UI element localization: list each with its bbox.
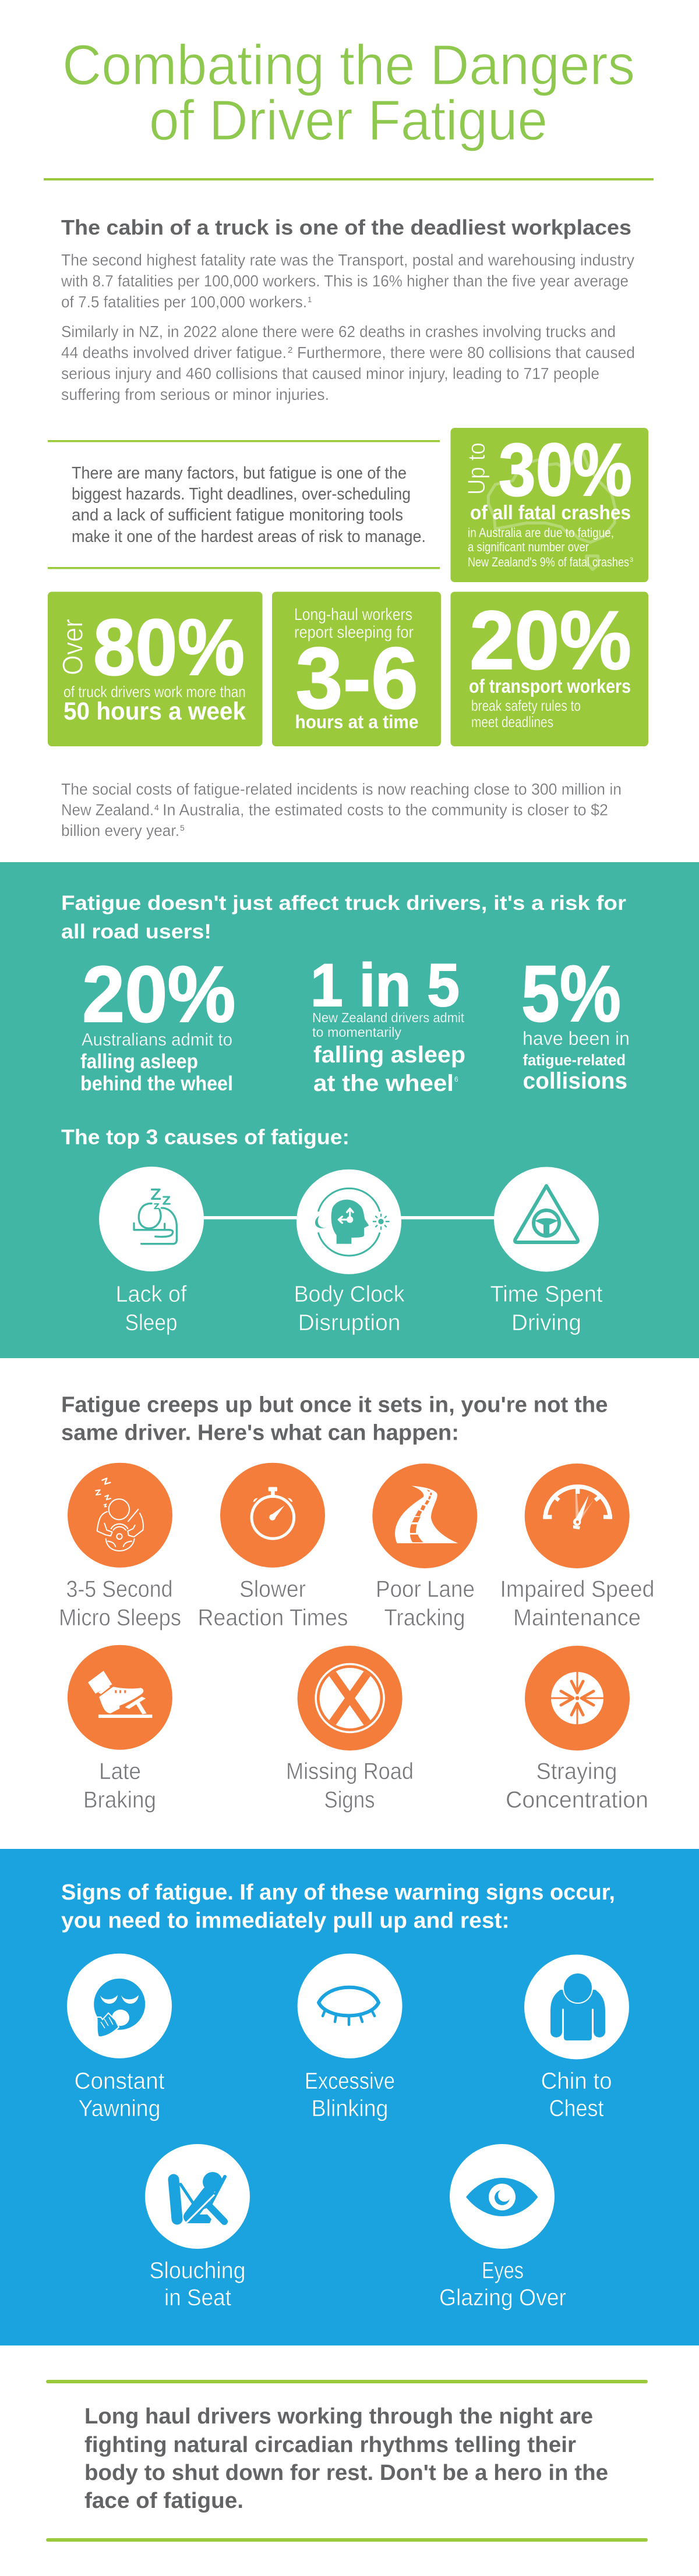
labels: signs: Glazing Over [439, 2285, 566, 2311]
text block: NZ deaths: Similarly in NZ, in 2022 alone there were 62 deaths in crashes involving trucks and [61, 323, 616, 341]
labels: signs: Yawning [78, 2096, 161, 2121]
text block: NZ deaths: serious injury and 460 collisions that caused minor injury, leading to 717 people [61, 364, 599, 382]
stat: 80%: 80% [93, 603, 245, 692]
title: Combating the Dangers [62, 33, 635, 97]
labels: signs: in Seat [164, 2285, 231, 2311]
icon: micro sleeps [68, 1463, 172, 1568]
icon: blinking eye [298, 1954, 403, 2058]
heading: all road users! [61, 920, 211, 943]
icon: speedometer [525, 1464, 630, 1568]
small print: 3 [630, 557, 633, 564]
stat: 1 in 5: falling asleep [313, 1042, 465, 1068]
icon: stopwatch [220, 1463, 325, 1568]
stat: 5%: have been in [523, 1027, 630, 1049]
icon: late braking [68, 1645, 172, 1750]
small print: in Australia are due to fatigue, [468, 525, 614, 540]
labels: effects: Signs [324, 1787, 375, 1813]
icon: yawning [67, 1954, 172, 2058]
stat: 5%: collisions [523, 1068, 627, 1094]
labels: effects: Micro Sleeps [59, 1605, 181, 1631]
panel: over 80% [48, 591, 262, 746]
icon: winding road [372, 1464, 477, 1568]
labels: effects: Straying [536, 1759, 617, 1784]
panel: what can happen [59, 1392, 655, 1813]
text block: social costs: The social costs of fatigue-related incidents is now reaching close to 300 million in [61, 780, 622, 798]
stat: 3-6: 3-6 [296, 629, 418, 727]
text block: social costs: New Zealand. [61, 801, 154, 818]
stat: 1 in 5 [310, 952, 465, 1096]
heading: you need to immediately pull up and rest: [61, 1908, 509, 1933]
text block: fatality rate [61, 251, 634, 311]
text block: fatality rate: 1 [308, 295, 312, 304]
labels: effects: Tracking [384, 1605, 465, 1631]
over: Over [57, 619, 89, 675]
icon: straying concentration [525, 1646, 630, 1751]
heading: Fatigue creeps up but once it sets in, you're not the [61, 1392, 608, 1417]
icon: lack of sleep [99, 1167, 204, 1271]
caption: of truck drivers work more than [63, 683, 246, 701]
icon: time spent driving [494, 1167, 599, 1271]
stat caption: of all fatal crashes [470, 502, 631, 524]
labels: signs: Chest [549, 2096, 604, 2121]
labels: effects: Missing Road [286, 1759, 414, 1784]
text block: social costs: 5 [180, 823, 185, 832]
caption: report sleeping for [294, 623, 414, 642]
text block: NZ deaths: 44 deaths involved driver fatigue. [61, 343, 287, 362]
small print: a significant number over [468, 540, 589, 554]
labels: effects: Braking [83, 1787, 156, 1813]
text block: NZ deaths: Furthermore, there were 80 collisions that caused [297, 343, 635, 362]
text block: social costs: billion every year. [61, 821, 179, 839]
stat: 5%: fatigue-related [523, 1051, 626, 1069]
panel: signs of fatigue [0, 1849, 699, 2345]
text block: NZ deaths [61, 323, 635, 403]
causes labels: Driving [511, 1310, 581, 1335]
stat: 20% Australians [80, 950, 235, 1095]
stat: 1 in 5: at the wheel [313, 1071, 454, 1096]
callout: many factors: biggest hazards. Tight deadlines, over-scheduling [72, 485, 411, 504]
map of Australia [488, 451, 616, 569]
text block: fatality rate: with 8.7 fatalities per 100,000 workers. This is 16% higher than the five year average [61, 272, 629, 290]
labels: effects: Slower [239, 1576, 306, 1602]
labels: signs: Chin to [541, 2068, 612, 2094]
labels: signs [75, 2068, 612, 2311]
callout: closing message: face of fatigue. [84, 2489, 243, 2513]
causes labels: Sleep [125, 1310, 177, 1335]
labels: effects: Reaction Times [198, 1605, 348, 1631]
small print [468, 525, 633, 569]
caption: break safety rules to [471, 697, 581, 714]
icon: body clock [296, 1170, 401, 1274]
up to: Up to [463, 442, 490, 495]
icon: glazed eye [450, 2144, 555, 2249]
causes labels: Lack of [115, 1282, 187, 1307]
of transport workers: of transport workers [469, 675, 631, 697]
text block: social costs [61, 780, 622, 839]
stat: 20% Australians: 20% [82, 950, 235, 1039]
stat: 1 in 5: 6 [454, 1075, 458, 1083]
labels: signs: Blinking [311, 2096, 388, 2121]
heading [61, 1880, 615, 1933]
heading: same driver. Here's what can happen: [61, 1420, 459, 1445]
causes labels: Time Spent [490, 1282, 603, 1307]
50 hours a week: 50 hours a week [63, 697, 246, 725]
caption [471, 697, 581, 731]
stat: 1 in 5: to momentarily [312, 1025, 402, 1040]
labels: effects: Impaired Speed [500, 1576, 655, 1602]
title [62, 33, 635, 152]
panel: 3-6 hours [272, 591, 441, 746]
causes labels: Body Clock [294, 1282, 405, 1307]
labels: signs: Excessive [305, 2068, 395, 2094]
panel: intro [61, 215, 635, 403]
labels: signs: Eyes [482, 2258, 524, 2283]
text block: social costs: In Australia, the estimated costs to the community is closer to $2 [163, 801, 608, 818]
icon: chin to chest [524, 1955, 629, 2060]
text block: NZ deaths: suffering from serious or minor injuries. [61, 385, 329, 403]
small print: New Zealand's 9% of fatal crashes [468, 555, 629, 569]
caption: Long-haul workers [294, 605, 412, 624]
callout: many factors: and a lack of sufficient fatigue monitoring tools [72, 506, 403, 525]
stat: 20% Australians: falling asleep [80, 1050, 198, 1073]
stat: 30%: 30% [499, 428, 632, 512]
callout: many factors [48, 440, 440, 569]
icon: missing road sign [298, 1646, 403, 1751]
text block: fatality rate: The second highest fatality rate was the Transport, postal and warehousing industry [61, 251, 634, 269]
labels: effects: Late [99, 1759, 141, 1784]
causes labels: Disruption [298, 1310, 401, 1335]
stat: 5%: 5% [521, 949, 621, 1039]
heading: Fatigue doesn't just affect truck drivers, it's a risk for [61, 891, 626, 915]
stat: 5% [521, 949, 630, 1094]
text block: NZ deaths: 2 [288, 345, 292, 355]
stat: 20% Australians: behind the wheel [80, 1072, 233, 1095]
title: of Driver Fatigue [149, 88, 548, 152]
callout: closing message [46, 2380, 648, 2542]
caption: meet deadlines [471, 713, 553, 731]
panel: teal, all road users [0, 862, 699, 1358]
labels: effects: Poor Lane [376, 1576, 475, 1602]
callout: closing message: fighting natural circadian rhythms telling their [84, 2433, 576, 2457]
hours at a time: hours at a time [295, 711, 418, 732]
heading: Signs of fatigue. If any of these warning signs occur, [61, 1880, 615, 1905]
causes labels [115, 1282, 603, 1335]
callout: closing message: body to shut down for rest. Don't be a hero in the [84, 2461, 608, 2485]
text block: fatality rate: of 7.5 fatalities per 100,000 workers. [61, 293, 307, 311]
stat: 1 in 5: New Zealand drivers admit [312, 1010, 465, 1025]
labels: signs: Slouching [149, 2258, 246, 2283]
icon: slouching [145, 2144, 250, 2249]
stat: 20%: 20% [469, 594, 631, 687]
callout: closing message: Long haul drivers working through the night are [84, 2404, 593, 2429]
labels: effects: Maintenance [513, 1605, 641, 1631]
labels: effects: Concentration [506, 1787, 648, 1813]
labels: effects [59, 1576, 655, 1813]
panel: 20% of transport workers [451, 591, 648, 746]
labels: effects: 3-5 Second [66, 1576, 172, 1602]
panel: 30% of fatal crashes [451, 428, 648, 582]
callout: many factors: make it one of the hardest areas of risk to manage. [72, 527, 426, 546]
stat: 1 in 5: 1 in 5 [310, 952, 460, 1019]
heading: deadliest workplaces: The cabin of a truck is one of the deadliest workplaces [61, 215, 631, 239]
heading [61, 1392, 608, 1445]
text block: social costs: 4 [154, 803, 159, 812]
caption [294, 605, 414, 642]
labels: signs: Constant [75, 2068, 165, 2094]
heading [61, 891, 626, 943]
heading: top 3 causes: The top 3 causes of fatigue: [61, 1125, 350, 1149]
stat: 20% Australians: Australians admit to [82, 1029, 232, 1050]
callout: many factors: There are many factors, but fatigue is one of the [72, 464, 407, 483]
